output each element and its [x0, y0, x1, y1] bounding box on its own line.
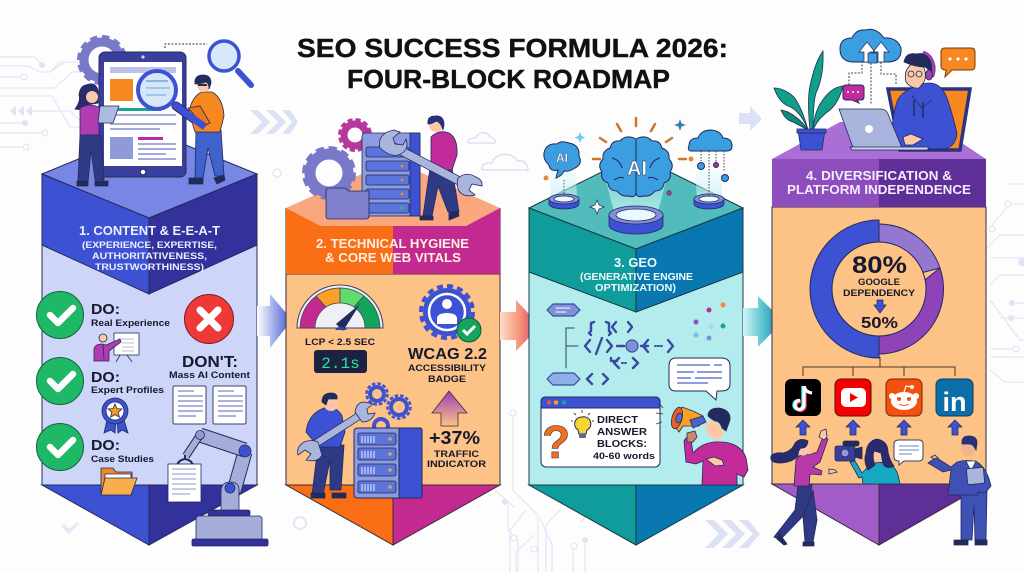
icon: chat bubbles	[843, 48, 975, 103]
text: do expert profiles: Expert Profiles	[91, 385, 164, 396]
panel: block 4 diversification	[772, 122, 986, 545]
title: FOUR-BLOCK ROADMAP	[347, 64, 670, 94]
icon: Reddit	[886, 379, 922, 416]
text: direct answer blocks: DIRECT	[597, 414, 639, 426]
text: do case studies: DO:	[91, 437, 120, 454]
icon: TikTok	[785, 379, 821, 416]
text: direct answer blocks	[593, 414, 655, 462]
diagram: platform connectors	[803, 357, 955, 376]
text: do expert profiles: DO:	[91, 369, 120, 386]
icon: check 2	[36, 358, 84, 404]
text: traffic indicator: TRAFFIC	[434, 449, 479, 460]
icon: magnifier on tablet	[138, 71, 205, 127]
figure: man with megaphone	[656, 403, 748, 485]
figure: woman with camera	[835, 439, 900, 484]
illustration: engineer with server	[298, 384, 422, 498]
arrow: block 1 to block 2	[257, 294, 292, 348]
list: do and don't	[36, 292, 268, 546]
heading: block 2	[316, 237, 469, 265]
figure: woman gesturing	[771, 429, 837, 546]
icon: question mark: ?	[542, 416, 570, 468]
title: SEO SUCCESS FORMULA 2026:	[297, 33, 728, 63]
text: WCAG 2.2 accessibility badge: WCAG 2.2	[408, 346, 487, 363]
chart: scatter dots	[694, 302, 726, 340]
panel: block 1 content and E-E-A-T	[42, 130, 257, 545]
text: traffic indicator: INDICATOR	[427, 459, 486, 470]
figure: man with magnifier	[184, 75, 225, 184]
icon: folder	[101, 468, 137, 495]
heading: block 1: TRUSTWORTHINESS)	[95, 262, 204, 273]
icon: accessibility badge	[421, 286, 481, 342]
heading: block 3	[580, 255, 693, 294]
heading: block 3: (GENERATIVE ENGINE	[580, 272, 693, 283]
heading: block 2: 2. TECHNICAL HYGIENE	[316, 237, 469, 251]
text: don't mass AI content	[169, 354, 251, 381]
illustration: remote worker with cloud	[774, 29, 975, 150]
panel: direct answer browser window	[541, 397, 660, 468]
icon: plant	[774, 51, 843, 150]
illustration: tablet with people	[75, 38, 251, 186]
arrow: traffic up	[432, 391, 467, 426]
text: LCP label: LCP < 2.5 SEC	[305, 337, 375, 348]
icon: chair	[888, 89, 970, 150]
figure: man with wrench	[380, 116, 482, 220]
metric: digital readout: 2.1s	[321, 355, 360, 373]
decorative chevrons: bottom	[705, 520, 760, 548]
text: traffic indicator	[427, 428, 486, 470]
text: do real experience: Real Experience	[91, 318, 170, 329]
icon: magnifier top right	[165, 41, 251, 85]
icon: laptop	[839, 109, 928, 150]
figure: engineer in blue hoodie	[298, 393, 375, 498]
icon: large AI brain: AI	[627, 158, 647, 180]
text: donut labels: DEPENDENCY	[843, 288, 916, 299]
icon: duplicate documents	[173, 386, 246, 424]
icon: LinkedIn	[936, 379, 973, 417]
icon: cloud with data	[688, 130, 732, 197]
icon: small AI brain: AI	[556, 151, 568, 165]
icon: large AI brain	[600, 137, 672, 197]
text: don't mass AI content: Mass AI Content	[169, 370, 251, 381]
heading: block 4	[787, 168, 971, 197]
icons: up arrows	[796, 420, 962, 435]
text: traffic indicator: +37%	[429, 428, 480, 448]
illustration: robot arm	[168, 430, 268, 546]
text: do real experience: DO:	[91, 301, 120, 318]
figure: man at laptop	[892, 52, 957, 149]
icon: server rack	[362, 133, 420, 216]
text: direct answer blocks: ANSWER	[597, 426, 647, 438]
icon: podiums	[549, 194, 724, 234]
icon: folder	[326, 188, 369, 219]
heading: block 3: 3. GEO	[614, 255, 657, 270]
text: do expert profiles	[91, 369, 164, 396]
text: donut labels	[843, 252, 916, 332]
icon: presenter	[94, 333, 139, 362]
text: direct answer blocks: BLOCKS:	[597, 438, 647, 450]
heading: block 1: 1. CONTENT & E-E-A-T	[79, 224, 220, 238]
diagram: code structure	[547, 304, 673, 385]
heading: block 2: & CORE WEB VITALS	[325, 251, 461, 265]
text: do case studies	[91, 437, 154, 465]
icon: comment bubble	[894, 440, 923, 465]
arrow: block 2 to block 3	[500, 300, 540, 351]
arrow: down	[874, 300, 886, 313]
text: WCAG 2.2 accessibility badge: BADGE	[428, 374, 466, 385]
heading: block 1	[79, 224, 220, 273]
heading: block 4: PLATFORM INDEPENDENCE	[787, 182, 971, 197]
heading: block 4: 4. DIVERSIFICATION &	[806, 168, 952, 183]
icon: check 1	[36, 292, 84, 338]
panel: block 3 GEO	[529, 155, 743, 545]
heading: block 3: OPTIMIZATION)	[595, 283, 676, 294]
icon: light bulb	[571, 410, 594, 438]
decorative chevrons: top left	[250, 110, 298, 134]
title	[297, 33, 728, 94]
chart: LCP gauge	[297, 285, 383, 373]
decorative arrow: top right	[739, 106, 762, 131]
figure: man in suit	[928, 436, 991, 545]
text: don't mass AI content: DON'T:	[182, 354, 238, 371]
icon: award ribbon	[102, 398, 128, 433]
illustration: AI brains on podiums	[544, 118, 732, 234]
icon: cloud upload	[840, 29, 901, 105]
text: do case studies: Case Studies	[91, 454, 154, 465]
text: WCAG 2.2 accessibility badge: ACCESSIBILITY	[408, 363, 487, 374]
illustration: server, gears and engineer	[305, 116, 482, 220]
heading: block 1: AUTHORITATIVENESS,	[92, 251, 207, 262]
text: do real experience	[91, 301, 170, 329]
icon: speech bubble	[669, 358, 730, 400]
arrow: block 3 to block 4	[743, 296, 783, 347]
text: WCAG 2.2 accessibility badge	[408, 346, 487, 385]
text: direct answer blocks: 40-60 words	[593, 451, 655, 462]
panel: block 2 technical hygiene	[286, 160, 500, 545]
figure: woman with tablet	[75, 84, 119, 186]
decorative rays and sparkles	[593, 118, 686, 159]
icon: YouTube	[835, 379, 871, 416]
icon: gears	[305, 120, 370, 197]
icon: check 3	[36, 424, 84, 470]
icon: LinkedIn: in	[942, 387, 966, 417]
text: donut labels: 50%	[861, 315, 898, 332]
icon: small AI brain	[544, 142, 580, 198]
chart: Google dependency donut	[810, 220, 943, 358]
text: donut labels: 80%	[852, 252, 907, 279]
icon: red cross	[184, 294, 234, 344]
text: donut labels: GOOGLE	[858, 277, 900, 288]
heading: block 1: (EXPERIENCE, EXPERTISE,	[82, 240, 217, 251]
